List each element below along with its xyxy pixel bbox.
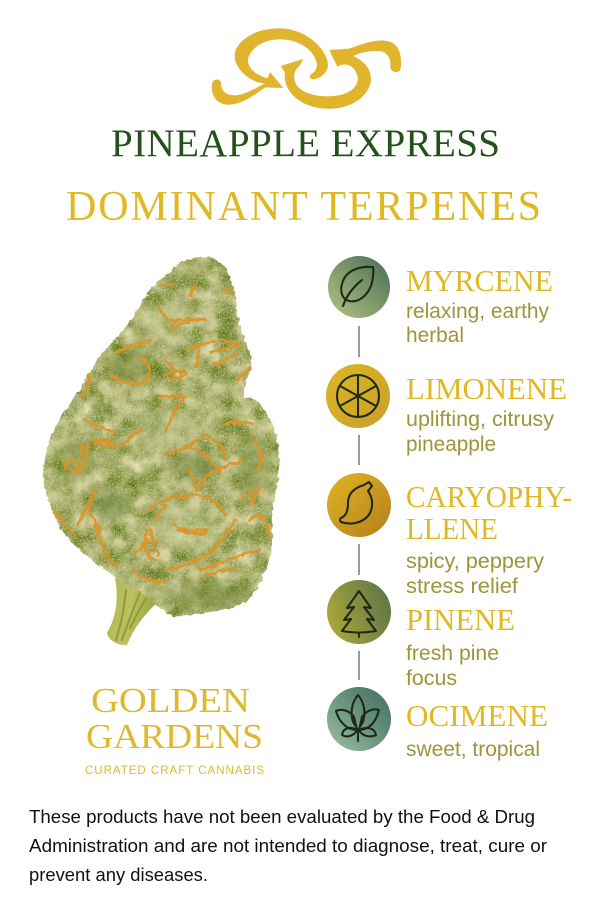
connector lines <box>358 326 360 680</box>
disclaimer text: These products have not been evaluated by the Food & Drug <box>29 806 535 827</box>
text: caryophyllene: spicy, peppery <box>406 550 544 573</box>
text: caryophyllene: stress relief <box>406 575 518 598</box>
disclaimer text: prevent any diseases. <box>29 864 208 885</box>
text: limonene: pineapple <box>406 433 496 456</box>
title: strain name: PINEAPPLE EXPRESS <box>111 122 500 165</box>
icon: pine tree <box>327 580 391 644</box>
icon: citrus slice <box>326 364 390 428</box>
logo emblem <box>212 28 401 109</box>
panel: terpene list <box>326 256 572 761</box>
text: myrcene: herbal <box>406 324 464 347</box>
disclaimer text: Administration and are not intended to diagnose, treat, cure or <box>29 835 547 856</box>
disclaimer text <box>29 806 547 885</box>
image: cannabis bud <box>30 250 290 645</box>
text: limonene: LIMONENE <box>406 371 567 406</box>
icon: chili pepper <box>327 473 391 537</box>
brand: golden gardens: GARDENS <box>86 717 263 756</box>
text: pinene: PINENE <box>406 602 515 637</box>
text: myrcene: MYRCENE <box>406 263 553 298</box>
icon: leaf <box>328 256 390 318</box>
text: limonene: uplifting, citrusy <box>406 408 555 431</box>
bud pistils <box>55 285 268 582</box>
brand: golden gardens <box>85 681 264 777</box>
text: caryophyllene: CARYOPHY- <box>406 479 572 514</box>
brand name: GOLDEN <box>91 681 250 720</box>
icon: cannabis leaf <box>327 687 391 751</box>
text: limonene <box>406 371 567 456</box>
text: ocimene: OCIMENE <box>406 698 548 733</box>
text: pinene: fresh pine <box>406 642 499 665</box>
text: myrcene <box>406 263 553 347</box>
text: ocimene: sweet, tropical <box>406 738 540 761</box>
text: caryophyllene <box>406 479 572 598</box>
text: pinene: focus <box>406 667 457 690</box>
text: myrcene: relaxing, earthy <box>406 300 549 323</box>
heading: dominant terpenes: DOMINANT TERPENES <box>66 184 541 230</box>
bud stem <box>107 578 160 645</box>
text: caryophyllene: LLENE <box>406 511 498 546</box>
brand tagline: CURATED CRAFT CANNABIS <box>85 765 264 777</box>
text: pinene <box>406 602 515 690</box>
text: ocimene <box>406 698 548 761</box>
bud body <box>42 256 280 618</box>
